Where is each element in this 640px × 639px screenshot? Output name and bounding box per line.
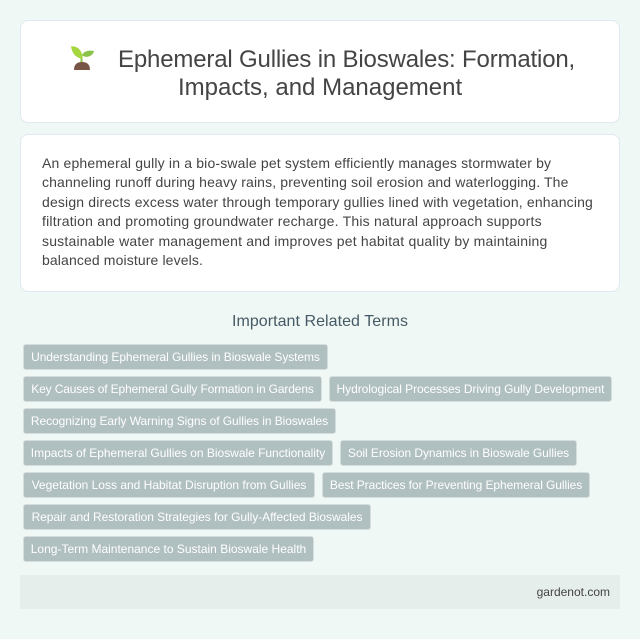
tag: Long-Term Maintenance to Sustain Bioswale Health — [31, 542, 306, 556]
title: Ephemeral Gullies in Bioswales: Formation, — [118, 46, 575, 73]
tag: Best Practices for Preventing Ephemeral Gullies — [330, 478, 582, 492]
text block: description: balanced moisture levels. — [42, 252, 203, 268]
tag — [23, 344, 328, 370]
tag: Soil Erosion Dynamics in Bioswale Gullies — [348, 446, 569, 460]
text block: description: An ephemeral gully in a bio-swale pet system efficiently manages stormwater by — [42, 155, 551, 171]
title — [118, 46, 575, 101]
tag — [340, 440, 577, 466]
icon: seedling — [71, 46, 94, 70]
footer text: site name: gardenot.com — [537, 585, 610, 599]
text block: description: design directs excess water through temporary gullies lined with vegetation, enhancing — [42, 194, 593, 210]
tag — [23, 440, 333, 466]
panel: related term tags — [23, 344, 612, 562]
text block: description: filtration and promoting groundwater recharge. This natural approach supports — [42, 213, 542, 229]
tag: Repair and Restoration Strategies for Gully-Affected Bioswales — [32, 510, 362, 524]
tag: Hydrological Processes Driving Gully Development — [337, 382, 604, 396]
tag: Key Causes of Ephemeral Gully Formation in Gardens — [31, 382, 314, 396]
title: Impacts, and Management — [178, 74, 462, 101]
text block: description: sustainable water management and improves pet habitat quality by maintaining — [42, 233, 548, 249]
tag: Impacts of Ephemeral Gullies on Bioswale Functionality — [31, 446, 325, 460]
tag: Understanding Ephemeral Gullies in Bioswale Systems — [31, 350, 320, 364]
tag — [23, 472, 315, 498]
tag — [23, 408, 336, 434]
tag — [322, 472, 590, 498]
tag — [23, 536, 314, 562]
tag — [23, 376, 322, 402]
panel: description — [20, 134, 620, 292]
text block: description — [42, 155, 593, 268]
panel: title card — [20, 20, 620, 123]
tag — [23, 504, 371, 530]
tag: Vegetation Loss and Habitat Disruption from Gullies — [32, 478, 306, 492]
footer — [20, 575, 620, 609]
tag — [329, 376, 612, 402]
heading: related terms: Important Related Terms — [232, 313, 408, 330]
text block: description: channeling runoff during heavy rains, preventing soil erosion and waterlogging. The — [42, 174, 569, 190]
tag: Recognizing Early Warning Signs of Gullies in Bioswales — [31, 414, 328, 428]
